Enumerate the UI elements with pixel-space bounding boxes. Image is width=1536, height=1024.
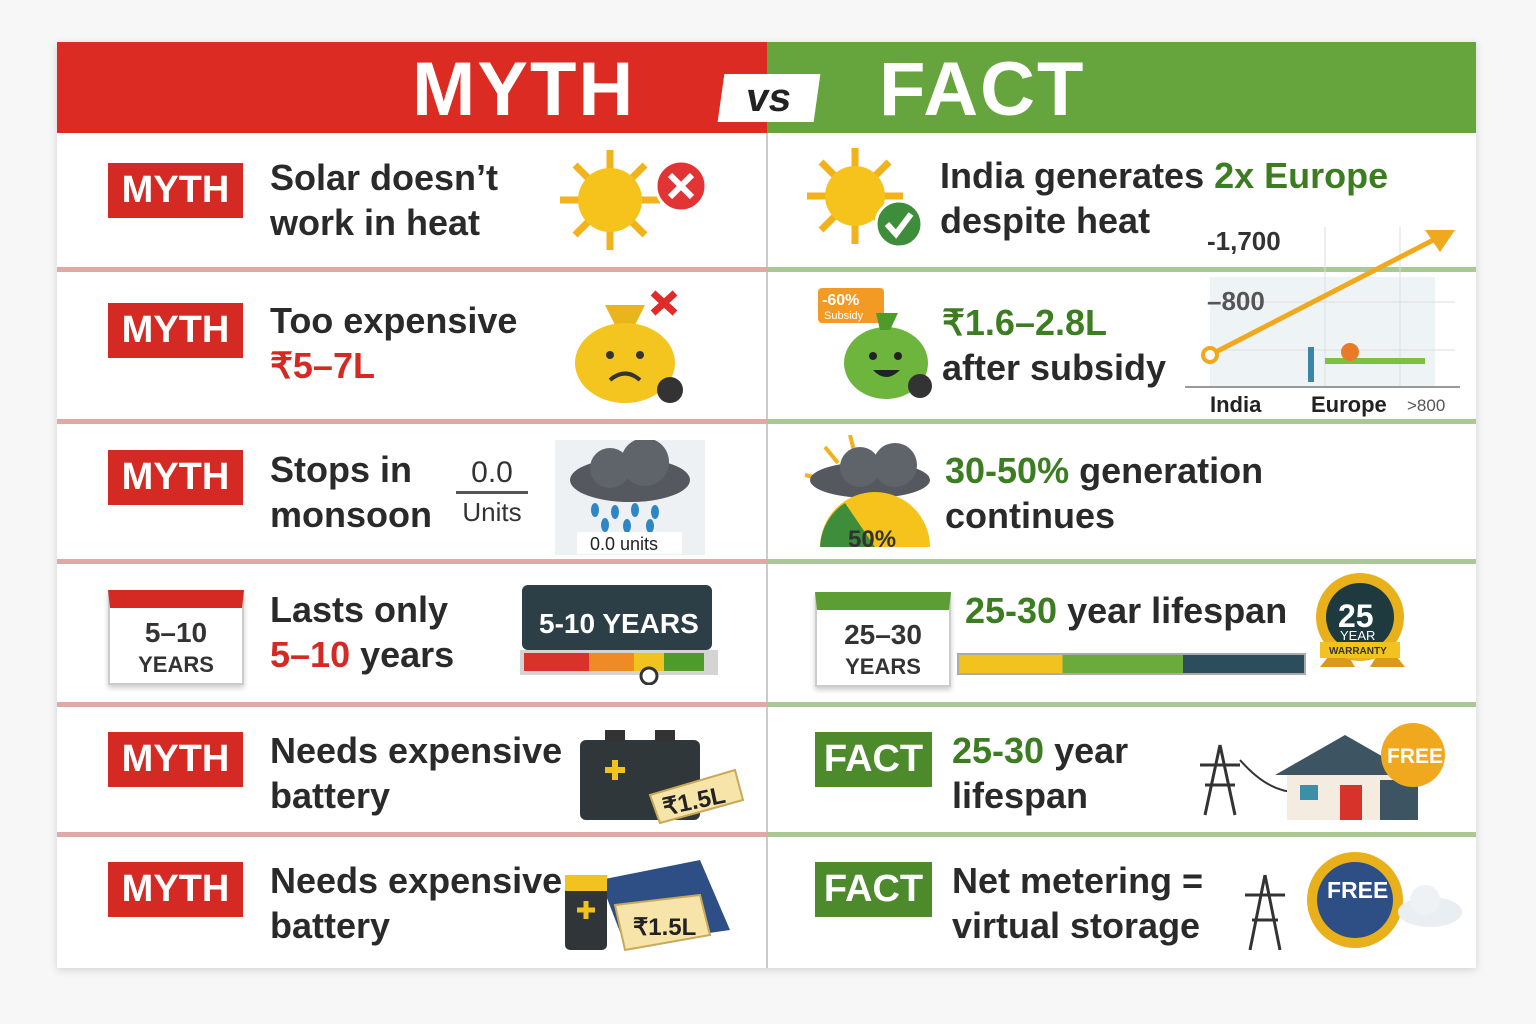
row2 fact text [942, 302, 1166, 388]
row6 myth badge: MYTH [122, 868, 229, 910]
chart: India vs Europe [1185, 226, 1460, 417]
row6 myth text [270, 860, 562, 946]
icon: tower with free coin and cloud: FREE [1327, 877, 1388, 903]
row3 myth text [270, 449, 432, 535]
row5 fact text [952, 730, 1128, 816]
row5 fact badge [815, 732, 932, 787]
row5 fact text: lifespan [952, 775, 1088, 816]
title: MYTH: MYTH [412, 47, 635, 132]
row1 myth badge [108, 163, 243, 218]
text: 0.0 units: 0.0 [471, 456, 513, 489]
row3 myth text: Stops in [270, 449, 412, 490]
row1 fact text: India generates 2x Europe [940, 155, 1388, 196]
chart: India vs Europe: >800 [1407, 396, 1445, 415]
row1 myth text [270, 157, 498, 243]
title: vs: vs [744, 76, 794, 120]
icon: sun with x [560, 150, 704, 250]
row4 fact: calendar icon: YEARS [845, 654, 921, 679]
row6 myth text: battery [270, 905, 390, 946]
icon: 5-10 years gauge: 5-10 YEARS [539, 608, 699, 639]
row5 myth text [270, 730, 562, 816]
icon: 25 year warranty medal [1316, 573, 1405, 667]
icon: rain cloud panel: 0.0 units [590, 534, 658, 554]
row4 fact text: 25-30 year lifespan [965, 590, 1287, 631]
row5 myth badge: MYTH [122, 738, 229, 780]
row5 fact badge: FACT [824, 738, 923, 780]
row2 fact: green bag icon [818, 288, 932, 399]
chart: India vs Europe: India [1210, 392, 1262, 417]
row2 myth text: ₹5–7L [270, 345, 375, 386]
row1 myth text: Solar doesn’t [270, 157, 498, 198]
row6 fact badge: FACT [824, 868, 923, 910]
row4 myth text: Lasts only [270, 589, 448, 630]
row3 fact text: continues [945, 495, 1115, 536]
row2 myth badge [108, 303, 243, 358]
icon: rain cloud panel [555, 440, 705, 555]
text: 0.0 units: Units [462, 497, 522, 527]
row1 myth badge: MYTH [122, 169, 229, 211]
icon: battery and panel: ₹1.5L [633, 914, 696, 941]
row2 fact text: ₹1.6–2.8L [942, 302, 1107, 343]
row5 myth text: battery [270, 775, 390, 816]
row1 myth text: work in heat [270, 202, 480, 243]
header: fact side [767, 42, 1476, 133]
icon: 25 year warranty medal: WARRANTY [1329, 646, 1387, 657]
header: myth side [57, 42, 767, 133]
row3 fact text [945, 450, 1263, 536]
row3 myth badge: MYTH [122, 456, 229, 498]
icon: sad money bag [575, 290, 683, 403]
row3 fact: cloud gauge icon [804, 435, 930, 550]
row5 fact text: 25-30 year [952, 730, 1128, 771]
row4 fact: calendar icon: 25–30 [844, 619, 922, 650]
row6 fact text [952, 860, 1203, 946]
icon: 25 year warranty medal: 25 [1338, 598, 1374, 634]
chart: India vs Europe: -1,700 [1207, 226, 1281, 256]
icon: 5-10 years gauge [520, 585, 718, 685]
row2 fact text: after subsidy [942, 347, 1166, 388]
chart: India vs Europe: Europe [1311, 392, 1387, 417]
text: 0.0 units [456, 456, 528, 527]
row2 fact: green bag icon: -60% [822, 292, 859, 309]
icon: 25 year warranty medal: YEAR [1340, 628, 1375, 643]
row2 myth text: Too expensive [270, 300, 517, 341]
icon: house grid free [1200, 723, 1445, 820]
lifespan bar [957, 653, 1306, 675]
row4 myth text [270, 589, 454, 675]
row6 fact text: virtual storage [952, 905, 1200, 946]
row6 fact badge [815, 862, 932, 917]
row4 myth: calendar icon: 5–10 [145, 617, 207, 648]
row3 fact text: 30-50% generation [945, 450, 1263, 491]
row4 fact: calendar icon [815, 592, 951, 687]
row3 myth text: monsoon [270, 494, 432, 535]
title: vs [718, 74, 820, 122]
title: FACT: FACT [879, 47, 1085, 132]
center divider [766, 133, 768, 968]
row6 fact text: Net metering = [952, 860, 1203, 901]
icon: battery with price tag: ₹1.5L [660, 782, 728, 821]
chart: India vs Europe: –800 [1207, 286, 1265, 316]
row6 myth badge [108, 862, 243, 917]
row1 fact text: despite heat [940, 200, 1150, 241]
row2 fact: green bag icon: Subsidy [824, 310, 864, 322]
icon: tower with free coin and cloud [1245, 852, 1462, 950]
row2 myth text [270, 300, 517, 386]
row4 myth: calendar icon [108, 590, 244, 685]
row2 myth badge: MYTH [122, 309, 229, 351]
row6 myth text: Needs expensive [270, 860, 562, 901]
row1 fact: sun check icon [807, 148, 920, 246]
row3 myth badge [108, 450, 243, 505]
row4 myth text: 5–10 years [270, 634, 454, 675]
icon: battery and panel [565, 860, 730, 952]
icon: house grid free: FREE [1387, 745, 1443, 768]
row5 myth badge [108, 732, 243, 787]
row1 fact text [940, 155, 1388, 241]
row4 myth: calendar icon: YEARS [138, 652, 214, 677]
row5 myth text: Needs expensive [270, 730, 562, 771]
header [57, 42, 1476, 133]
icon: battery with price tag [580, 730, 744, 824]
